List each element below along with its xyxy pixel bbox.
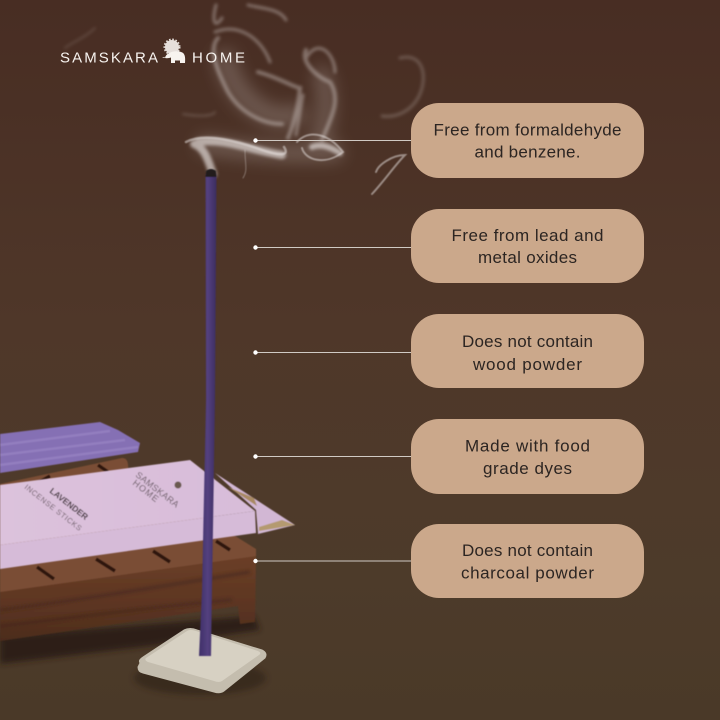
loose incense sticks [0, 422, 140, 473]
callout 1 [411, 103, 644, 178]
box top [0, 460, 255, 545]
callout 2: Free from lead and [452, 226, 604, 245]
logo icon: elephant and tree [162, 40, 185, 63]
box flap [215, 473, 295, 534]
connector 5 [255, 560, 411, 562]
callout 4 [411, 419, 644, 494]
ceramic holder [134, 628, 266, 695]
callout 3: wood powder [472, 355, 582, 374]
callout 5 [411, 524, 644, 598]
callout 2 [411, 209, 644, 283]
burnt tip [206, 169, 216, 177]
box front [0, 511, 256, 569]
logo wordmark right: HOME [192, 50, 245, 66]
callout 4: Made with food [465, 436, 590, 456]
box label name: LAVENDER [48, 486, 90, 522]
callout 3 [411, 314, 644, 388]
incense box [0, 460, 295, 569]
connector 4 [255, 456, 411, 458]
incense stick [199, 169, 216, 656]
connector 1 [255, 140, 411, 142]
wooden tray [0, 458, 256, 641]
logo wordmark left: SAMSKARA [60, 50, 158, 66]
callout connectors [255, 140, 411, 561]
callout 2: metal oxides [478, 248, 577, 267]
callout 5: charcoal powder [461, 564, 594, 582]
box label brand: SAMSKARA [134, 470, 181, 510]
connector dots [253, 138, 258, 563]
connector 3 [255, 352, 411, 354]
callout 5: Does not contain [462, 541, 593, 560]
logo [60, 40, 245, 66]
connector 2 [255, 246, 411, 248]
callout 4: grade dyes [483, 459, 572, 478]
box label type: INCENSE STICKS [23, 482, 83, 533]
box label icon [174, 482, 182, 488]
tray front [0, 556, 256, 641]
incense box: HOME [131, 478, 161, 504]
callout 1: Free from formaldehyde [434, 120, 622, 140]
callout 3: Does not contain [462, 332, 593, 351]
tray surface [0, 458, 256, 593]
callout 1: and benzene. [474, 142, 580, 162]
smoke [65, 5, 423, 194]
tray shadow [0, 616, 260, 664]
